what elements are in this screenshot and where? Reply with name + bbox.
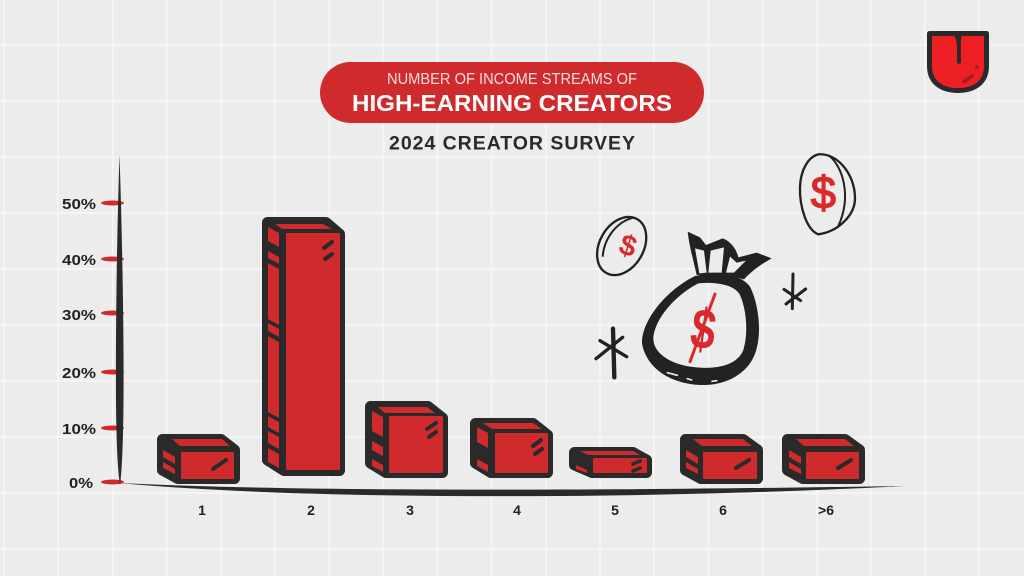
icon: small coin: $ [615, 228, 641, 264]
bar: more than 6 income streams [788, 439, 860, 479]
subtitle: 2024 CREATOR SURVEY [389, 132, 635, 154]
x axis [118, 483, 905, 496]
title pill [320, 62, 704, 123]
title line 2: HIGH-EARNING CREATORS [352, 90, 672, 116]
x axis labels: 5 [611, 502, 619, 518]
x axis labels: 1 [198, 502, 206, 518]
x axis labels [198, 502, 834, 518]
x axis labels: 6 [719, 502, 727, 518]
icon: bag neck [688, 232, 772, 279]
x axis labels: 2 [307, 502, 315, 518]
icon: large coin [800, 154, 855, 234]
title line 1: NUMBER OF INCOME STREAMS OF [387, 71, 637, 88]
icon: money bag illustration [642, 232, 772, 385]
icon: bag body [642, 274, 759, 385]
bar: 6 income streams [686, 439, 758, 479]
icon: star left [596, 329, 627, 377]
icon: star right [784, 274, 806, 309]
y axis [116, 155, 124, 485]
y axis labels [62, 196, 96, 492]
bar: 4 income streams [476, 423, 548, 473]
x axis labels: >6 [818, 502, 834, 518]
y axis labels: 40% [62, 252, 96, 269]
icon: small coin [587, 208, 656, 284]
icon: large coin: $ [811, 167, 836, 218]
bar: 2 income streams [268, 222, 340, 470]
y axis labels: 20% [62, 365, 96, 382]
bar: 3 income streams [370, 406, 443, 473]
bar: 1 income stream [162, 439, 234, 479]
bar: 5 income streams [574, 451, 647, 473]
logo [930, 33, 986, 90]
x axis labels: 3 [406, 502, 414, 518]
icon: bag neck highlights [695, 247, 746, 273]
y axis labels: 30% [62, 307, 96, 324]
x axis labels: 4 [513, 502, 521, 518]
y axis labels: 0% [69, 475, 93, 492]
y axis labels: 10% [62, 421, 96, 438]
icon: bag dollar sign: $ [687, 296, 720, 362]
y axis ticks [101, 200, 124, 484]
y axis labels: 50% [62, 196, 96, 213]
icon: bag glints [667, 373, 717, 381]
